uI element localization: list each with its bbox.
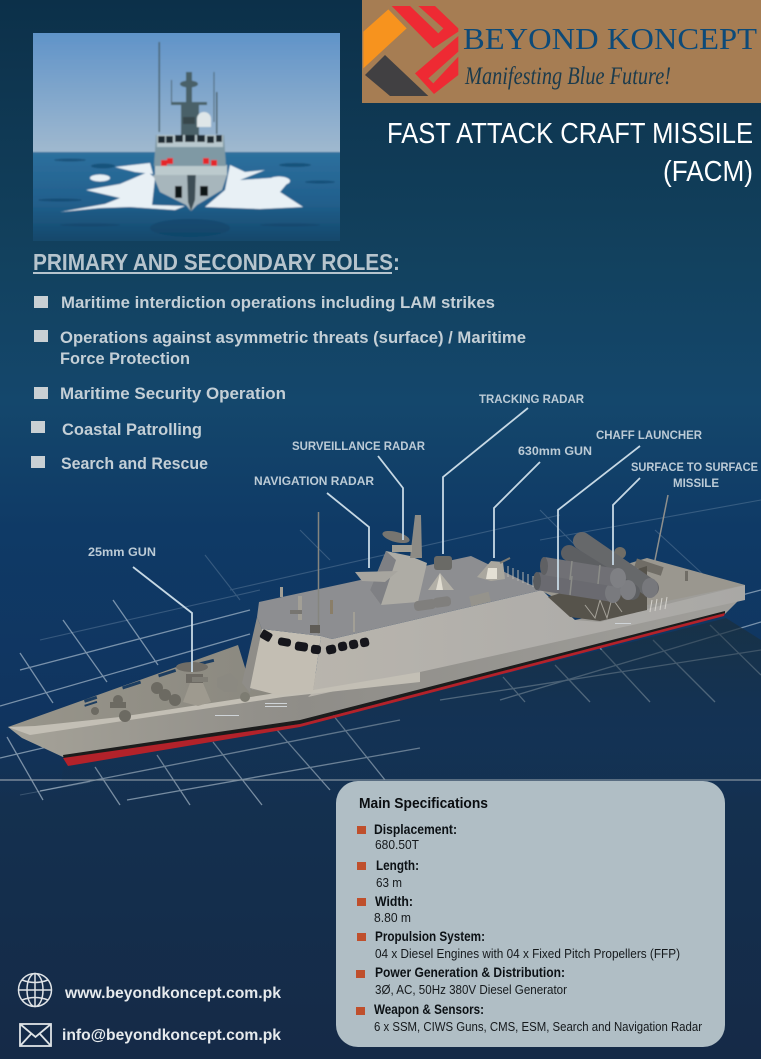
icon: envelope <box>20 1024 51 1046</box>
spec: length: 63 m <box>376 875 402 890</box>
wake <box>60 163 303 212</box>
aft vents <box>650 597 667 612</box>
role 3: Maritime Security Operation <box>60 384 286 403</box>
email: info@beyondkoncept.com.pk <box>62 1027 281 1044</box>
630mm gun <box>477 558 510 581</box>
funnel / tower <box>410 515 422 558</box>
hull lower band <box>8 585 745 757</box>
forward deck equipment <box>91 682 250 722</box>
ship shadow on water <box>60 618 761 800</box>
forecastle bulwark <box>8 672 420 735</box>
missile bay cut-out <box>548 566 647 621</box>
logo banner <box>362 0 761 103</box>
icon: globe <box>18 974 52 1006</box>
sea ripples <box>38 158 335 237</box>
forecastle deck <box>8 645 283 727</box>
tracking radar <box>428 573 454 590</box>
crate <box>217 673 238 692</box>
callout: surface to surface missile: MISSILE <box>673 476 719 490</box>
spec: displacement: 680.50T <box>375 837 419 852</box>
roles list <box>31 293 526 473</box>
missile launchers <box>533 541 658 603</box>
callout: surveillance radar: SURVEILLANCE RADAR <box>292 439 425 453</box>
callout: 25mm gun <box>88 545 192 672</box>
spec: power: Power Generation & Distribution: <box>375 965 565 980</box>
spec: length <box>357 858 419 890</box>
callout: 630mm gun: 630mm GUN <box>518 444 592 458</box>
role 1: Maritime interdiction operations including LAM strikes <box>61 293 495 312</box>
ship 3D model <box>8 495 745 766</box>
bridge left face <box>242 617 262 693</box>
title: (FACM) <box>663 156 753 188</box>
top deck <box>257 556 542 639</box>
forward deck markings <box>84 659 214 707</box>
heading: roles: PRIMARY AND SECONDARY ROLES: <box>33 249 400 275</box>
top deck fittings <box>280 587 355 633</box>
spec: propulsion: Propulsion System: <box>375 929 485 944</box>
deck boxes <box>413 592 491 611</box>
spec: displacement: Displacement: <box>374 822 457 837</box>
tagline: Manifesting Blue Future! <box>464 63 671 90</box>
spec: weapons <box>356 1002 703 1034</box>
red boot topping <box>63 613 725 766</box>
bridge front face <box>250 629 321 695</box>
callout: surface to surface missile <box>613 460 758 565</box>
callout: chaff launcher: CHAFF LAUNCHER <box>596 428 702 442</box>
aft deck fittings <box>614 547 688 581</box>
photo of the ship at sea <box>30 30 343 244</box>
truss <box>585 598 622 618</box>
panel heading: Main Specifications <box>359 795 488 812</box>
callout: navigation radar <box>254 474 374 568</box>
spec: weapons: 6 x SSM, CIWS Guns, CMS, ESM, Search and Navigation Radar <box>374 1019 703 1034</box>
callout: 630mm gun <box>494 444 592 558</box>
photo ship life rafts <box>161 158 217 166</box>
role 4: Coastal Patrolling <box>62 420 202 439</box>
panel: main specifications <box>336 781 725 1047</box>
reference grid under the ship <box>0 500 761 805</box>
navigation radar wing <box>355 571 398 582</box>
superstructure side <box>308 585 745 697</box>
logo mark <box>363 6 458 96</box>
horizon line <box>0 779 761 781</box>
surveillance radar <box>381 529 411 545</box>
callout: tracking radar <box>443 392 584 554</box>
railing <box>508 566 533 587</box>
spec: width <box>357 894 413 925</box>
side markings <box>215 623 631 716</box>
windows <box>259 629 370 655</box>
aft mast <box>654 495 668 565</box>
company name: BEYOND KONCEPT <box>463 21 757 56</box>
photo ship hull <box>153 175 227 211</box>
aft deck <box>540 558 745 622</box>
spec: width: Width: <box>375 894 413 909</box>
bridge mast <box>318 512 320 634</box>
spec: displacement <box>357 822 457 852</box>
title <box>387 118 753 188</box>
website: www.beyondkoncept.com.pk <box>64 985 281 1002</box>
spec: power: 3Ø, AC, 50Hz 380V Diesel Generator <box>375 982 568 997</box>
spec: weapons: Weapon & Sensors: <box>374 1002 484 1017</box>
spec: propulsion <box>357 929 680 961</box>
callout: chaff launcher <box>558 428 702 590</box>
callout: 25mm gun: 25mm GUN <box>88 545 156 559</box>
spec: power <box>356 965 568 997</box>
role 5: Search and Rescue <box>61 454 208 473</box>
role 2: Force Protection <box>60 349 190 368</box>
callout: navigation radar: NAVIGATION RADAR <box>254 474 374 488</box>
mast pyramid <box>370 551 427 605</box>
role 2: Operations against asymmetric threats (surface) / Maritime <box>60 328 526 347</box>
callout: surveillance radar <box>292 439 425 540</box>
black waterline <box>63 611 725 760</box>
spec: width: 8.80 m <box>374 910 411 925</box>
25mm gun <box>176 662 211 706</box>
spec: propulsion: 04 x Diesel Engines with 04 x Fixed Pitch Propellers (FFP) <box>375 946 680 961</box>
photo ship mast <box>158 42 218 135</box>
photo ship superstructure <box>154 135 226 166</box>
callout: tracking radar: TRACKING RADAR <box>479 392 584 406</box>
role 2 <box>34 328 526 368</box>
spec: length: Length: <box>376 858 419 873</box>
